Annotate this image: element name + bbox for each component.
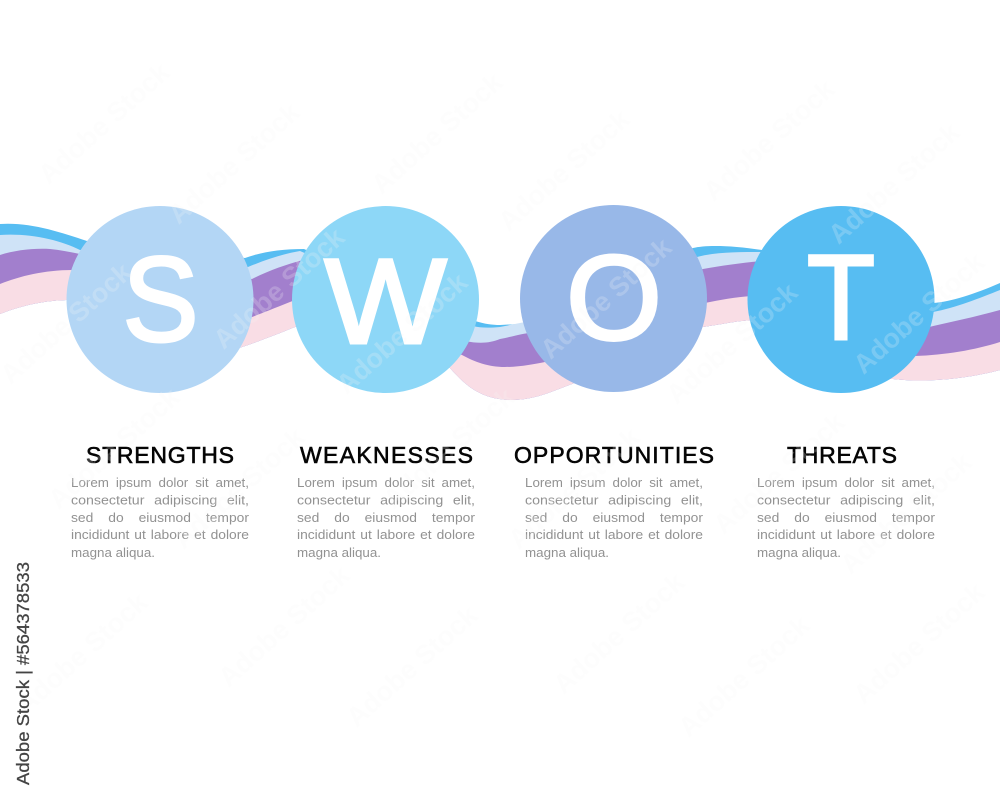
column: opportunities	[514, 442, 714, 560]
heading: threats: THREATS	[787, 442, 897, 468]
heading: opportunities: OPPORTUNITIES	[514, 442, 714, 468]
stock watermark overlay: Adobe Stock	[378, 381, 521, 515]
stock watermark overlay: Adobe Stock	[43, 381, 186, 515]
circle: W: W	[324, 234, 447, 369]
text block: weaknesses: Lorem ipsum dolor sit amet,	[297, 476, 475, 490]
stock watermark overlay: Adobe Stock	[493, 103, 636, 237]
circle: T	[748, 206, 934, 393]
stock watermark overlay: Adobe Stock	[661, 276, 804, 410]
text block: strengths: Lorem ipsum dolor sit amet,	[71, 476, 249, 490]
stock watermark overlay: Adobe Stock	[341, 599, 484, 733]
heading: strengths: STRENGTHS	[86, 442, 234, 468]
text block: strengths: consectetur adipiscing elit,	[71, 494, 249, 508]
stock watermark overlay: Adobe Stock	[503, 421, 646, 555]
text block: threats: magna aliqua.	[757, 546, 841, 560]
column: strengths	[71, 442, 249, 560]
stock watermark overlay: Adobe Stock	[848, 576, 991, 710]
stock watermark overlay: Adobe Stock	[848, 246, 991, 380]
text block: weaknesses	[297, 476, 475, 560]
stock watermark overlay: Adobe Stock	[208, 221, 351, 355]
text block: strengths: sed do eiusmod tempor	[71, 511, 249, 525]
stock watermark overlay: Adobe Stock	[673, 609, 816, 743]
flowing wave ribbon	[0, 224, 1000, 400]
text block: opportunities: consectetur adipiscing elit,	[525, 494, 703, 508]
stock id label: Adobe Stock | #564378533	[13, 562, 33, 785]
stock watermark overlay: Adobe Stock	[366, 66, 509, 200]
stock watermark overlay: Adobe Stock	[163, 96, 306, 230]
stock watermark overlay: Adobe Stock	[11, 586, 154, 720]
text block: opportunities: magna aliqua.	[525, 546, 609, 560]
stock watermark overlay: Adobe Stock	[331, 266, 474, 400]
column: weaknesses	[297, 442, 475, 560]
text block: threats: Lorem ipsum dolor sit amet,	[757, 476, 935, 490]
text block: weaknesses: incididunt ut labore et dolore	[297, 528, 475, 542]
text block: strengths: magna aliqua.	[71, 546, 155, 560]
text block: threats: consectetur adipiscing elit,	[757, 494, 935, 508]
text block: opportunities	[525, 476, 703, 560]
circle: O	[520, 205, 707, 392]
circle: S: S	[123, 232, 198, 367]
text block: strengths: incididunt ut labore et dolore	[71, 528, 249, 542]
circle: W	[292, 206, 479, 393]
circle: O: O	[566, 230, 662, 365]
text block: threats	[757, 476, 935, 560]
text block: weaknesses: sed do eiusmod tempor	[297, 511, 475, 525]
stock watermark overlay: Adobe Stock	[823, 116, 966, 250]
text block: strengths	[71, 476, 249, 560]
stock watermark overlay: Adobe Stock	[548, 566, 691, 700]
text block: opportunities: sed do eiusmod tempor	[525, 511, 703, 525]
stock watermark overlay: Adobe Stock	[213, 559, 356, 693]
stock watermark overlay: Adobe Stock	[835, 446, 978, 580]
circle: T: T	[807, 230, 875, 365]
text block: opportunities: incididunt ut labore et dolore	[525, 528, 703, 542]
text block: threats: sed do eiusmod tempor	[757, 511, 935, 525]
stock watermark overlay: Adobe Stock	[708, 406, 851, 540]
stock watermark overlay: Adobe Stock	[33, 56, 176, 190]
text block: opportunities: Lorem ipsum dolor sit amet,	[525, 476, 703, 490]
column: threats	[757, 442, 935, 560]
stock watermark overlay: Adobe Stock	[168, 421, 311, 555]
text block: threats: incididunt ut labore et dolore	[757, 528, 935, 542]
heading: weaknesses: WEAKNESSES	[300, 442, 473, 468]
stock watermark overlay: Adobe Stock	[698, 73, 841, 207]
stock watermark overlay: Adobe Stock	[535, 231, 678, 365]
text block: weaknesses: consectetur adipiscing elit,	[297, 494, 475, 508]
text block: weaknesses: magna aliqua.	[297, 546, 381, 560]
circle: S	[66, 206, 254, 393]
